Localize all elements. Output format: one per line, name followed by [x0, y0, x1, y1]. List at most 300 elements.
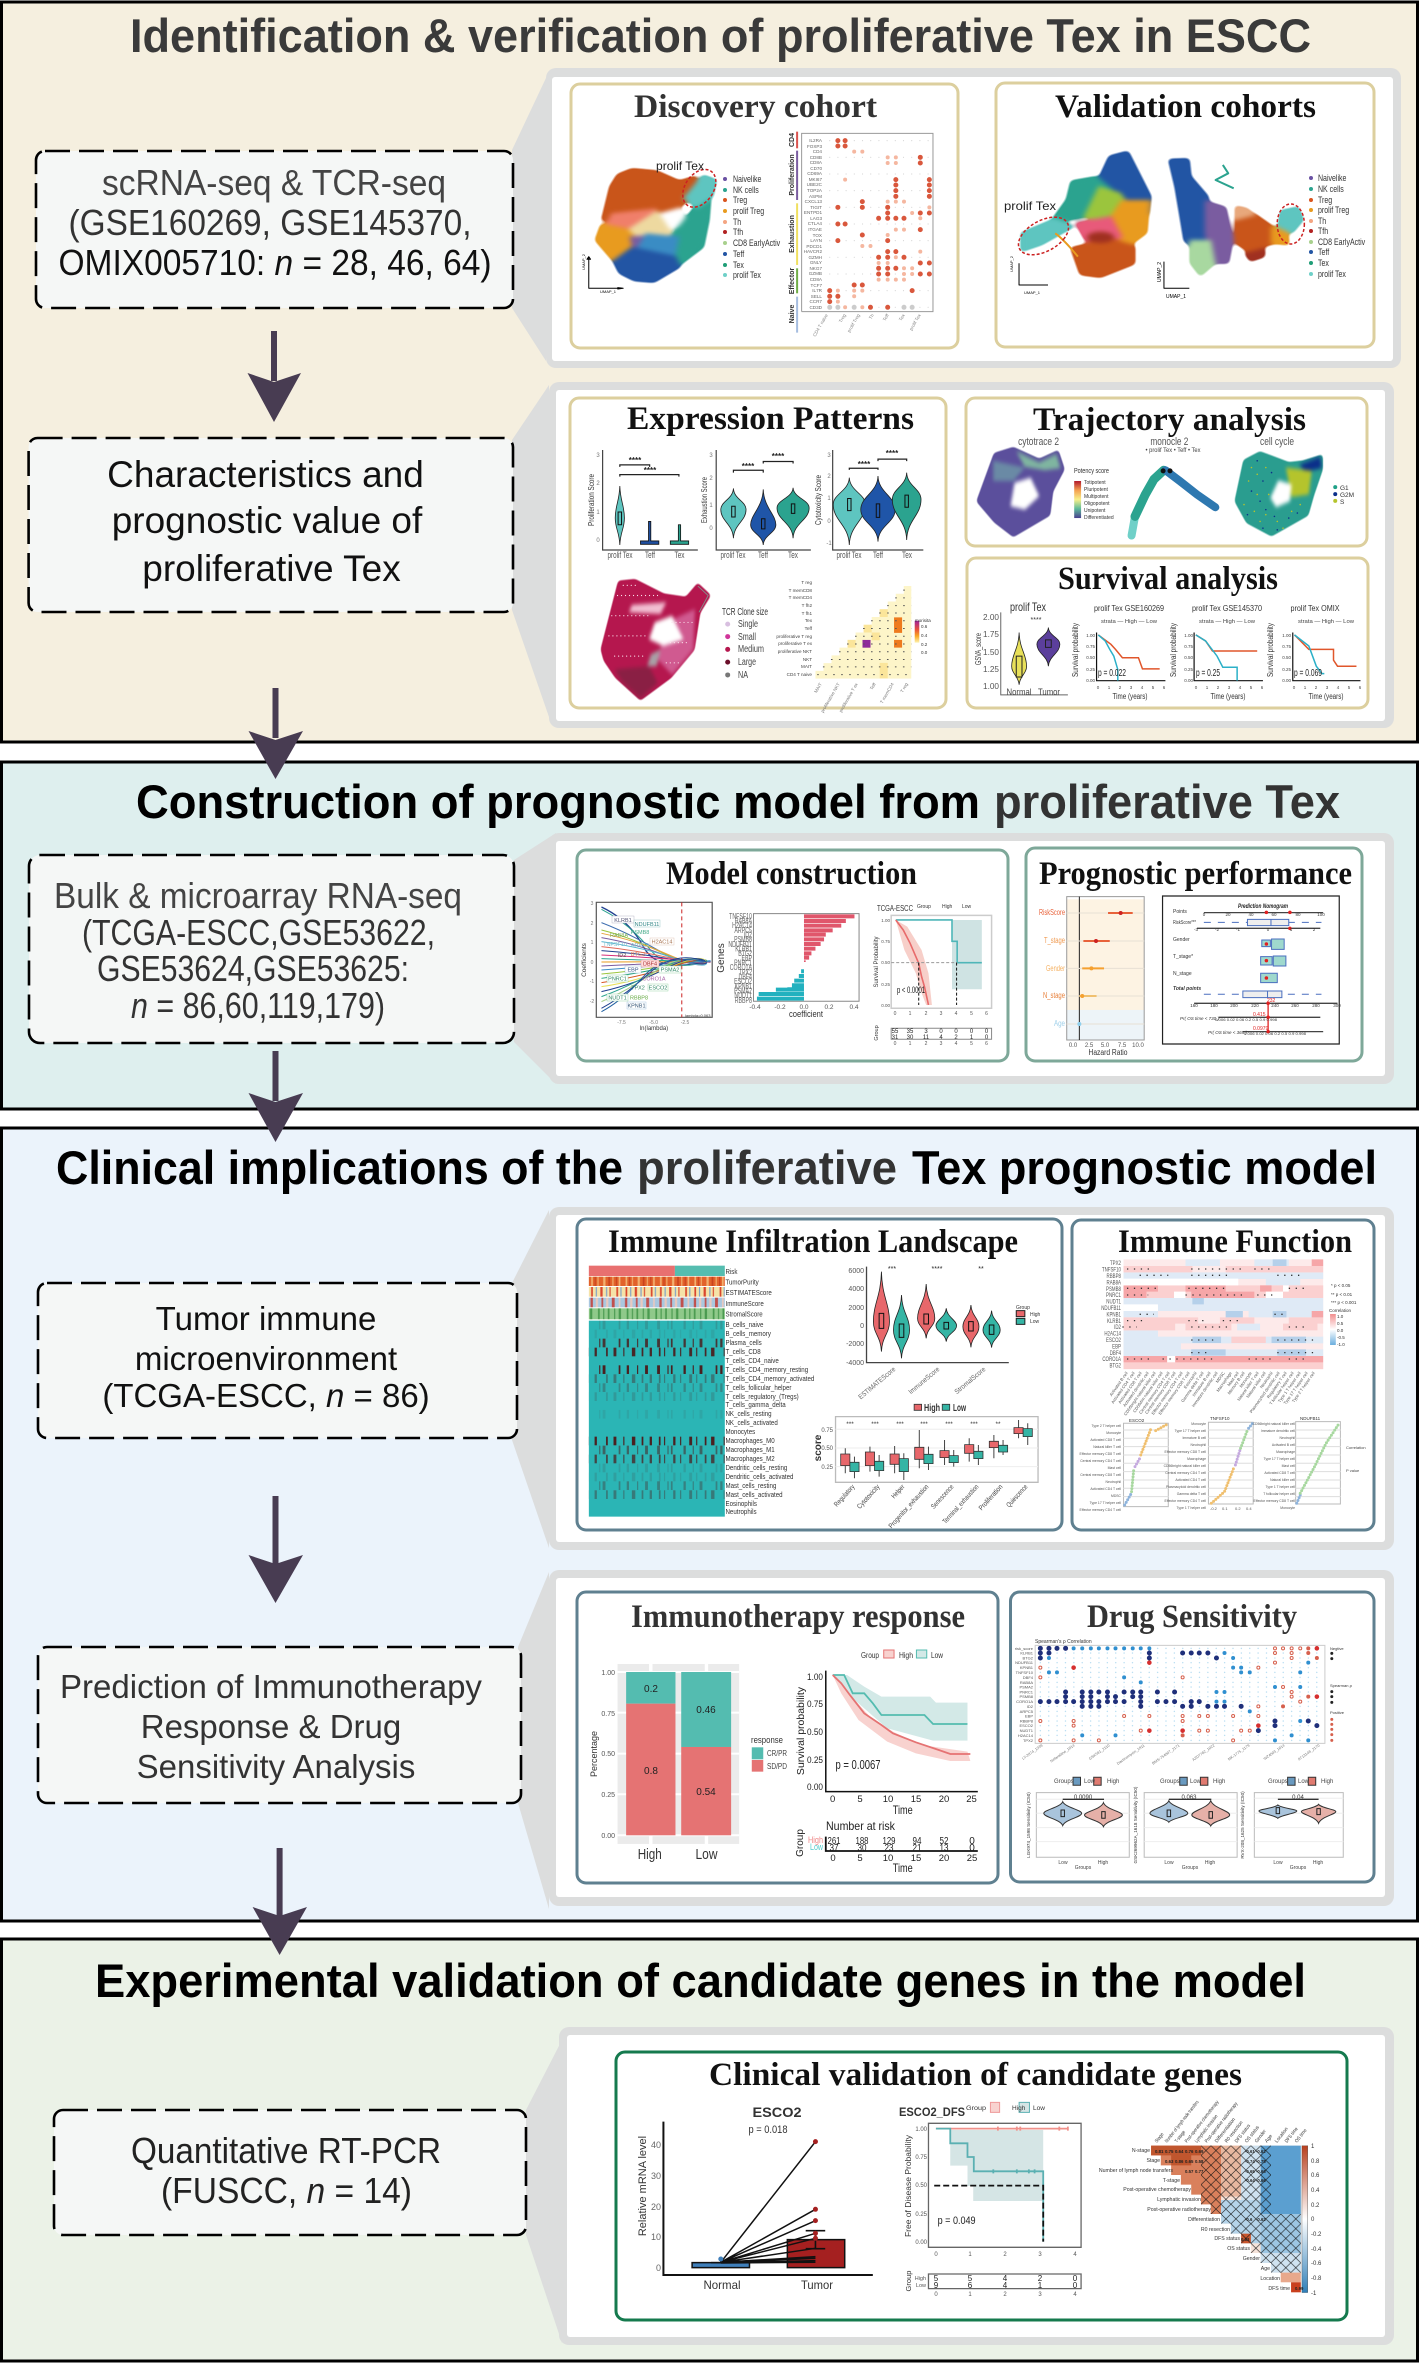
chart: lollipop TNFSF10: Activated CD4 T cell	[1175, 1478, 1206, 1482]
chart: KM GSE145370: 2	[1217, 685, 1220, 690]
chart: clinical correlation triangle: Lymphatic invasion	[1157, 2197, 1201, 2203]
callout panel: clinical validation	[526, 2027, 1394, 2345]
chart: ESCO2 DFS survival: 2	[1038, 2274, 1043, 2283]
chart: TCGA-ESCC survival: Group	[874, 1025, 880, 1041]
chart: clinical correlation triangle: Age	[1261, 2266, 1270, 2272]
chart: forest plot: 2.5	[1085, 1043, 1094, 1049]
chart: KM GSE145370: Survival probability	[1169, 623, 1178, 677]
chart: T cell state boxplots: Senescence	[930, 1484, 956, 1511]
chart: drug correlation dot matrix	[1015, 1639, 1353, 1766]
step box: characteristics: proliferative Tex	[142, 548, 401, 589]
chart: gene by immune function heatmap: -1.0	[1337, 1342, 1345, 1347]
chart: lollipop NDUFB11: Mast cell	[1282, 1464, 1295, 1468]
chart: lollipop NDUFB11: P value	[1346, 1468, 1360, 1473]
chart: TCR clone UMAP	[602, 580, 768, 699]
chart: gene by immune function heatmap: Natural killer T cell	[1236, 1371, 1260, 1402]
chart: coefficient bars: coefficient	[789, 1009, 823, 1019]
chart: discovery UMAP: prolif Tex	[656, 159, 704, 173]
chart: marker dot plot: LAYN	[810, 238, 822, 243]
chart: marker dot plot: TIGIT	[810, 205, 822, 210]
chart: score violins: prolif Tex	[836, 550, 862, 560]
chart: gene by immune function heatmap: Effector memory CD8 T cell	[1157, 1371, 1191, 1416]
step box: immunotherapy and drug sensitivity: Prediction of Immunotherapy	[60, 1668, 482, 1705]
chart: clinical correlation triangle: -0.6	[1311, 2261, 1322, 2267]
chart: coefficient bars: DBF4	[739, 974, 752, 982]
chart: coefficient bars: PNRC1	[734, 960, 752, 968]
chart: cytotrace UMAP: Unipotent	[1084, 508, 1106, 514]
chart: KM OMIX: Time (years)	[1308, 692, 1344, 701]
chart: lollipop TNFSF10: 0.4	[1246, 1506, 1252, 1511]
chart: ESCO2 DFS survival: 0.50	[915, 2183, 928, 2189]
chart: marker dot plot: PDCD1	[806, 244, 822, 249]
chart: immunotherapy survival curve: 13	[940, 1843, 949, 1854]
chart: coefficient bars: BTG2	[738, 950, 752, 958]
chart: ESCO2 DFS survival: Low	[916, 2283, 926, 2289]
step box: immunotherapy and drug sensitivity: Sensitivity Analysis	[137, 1748, 415, 1785]
chart: clinical correlation triangle: Post-operative radiotherapy	[1204, 2101, 1240, 2144]
chart: CIBERSORT heatmap: TumorPurity	[725, 1279, 759, 1287]
chart: gene by immune function heatmap: CORO1A	[1102, 1356, 1121, 1363]
chart: immunotherapy survival curve: Group	[795, 1829, 806, 1857]
chart: marker dot plot: CD4	[813, 149, 822, 154]
chart: clinical correlation triangle: 0.83	[1241, 2237, 1250, 2242]
chart: immunotherapy survival curve: p = 0.0067	[836, 1757, 880, 1772]
chart: drug correlation dot matrix: DBF4	[1023, 1675, 1034, 1680]
card: Immune Function	[1072, 1220, 1374, 1530]
chart: forest plot: RiskScore	[1039, 908, 1065, 917]
chart: monocle trajectory	[1132, 436, 1215, 536]
chart: triangular heatmap: morisita	[915, 618, 931, 623]
chart: KM GSE145370: prolif Tex GSE145370	[1192, 603, 1262, 613]
chart: LASSO coefficient paths: ln(lambda)	[640, 1026, 668, 1032]
chart: LASSO coefficient paths: DBF4	[643, 962, 657, 968]
chart: cell cycle UMAP: G1	[1340, 485, 1349, 492]
chart: prediction nomogram: Prediction Nomogram	[1238, 903, 1288, 910]
chart: gene by immune function heatmap: TPX2	[1110, 1260, 1121, 1267]
chart: marker dot plot: prolif Treg	[846, 313, 861, 333]
chart: ESCO2 paired qPCR bars: ESCO2	[752, 2104, 802, 2120]
callout panel: characteristics	[512, 382, 1394, 728]
chart: LASSO coefficient paths: KPNB1	[627, 1004, 646, 1010]
chart: KM GSE160269: Survival probability	[1071, 623, 1080, 677]
step box: tumor immune microenvironment: Tumor immune	[156, 1300, 376, 1337]
card: Expression Patterns: Expression Patterns	[627, 401, 914, 437]
chart: KM OMIX	[1266, 603, 1362, 701]
chart: cell cycle UMAP	[1236, 436, 1354, 535]
chart: prediction nomogram: 300	[1333, 1003, 1341, 1008]
chart: KM GSE160269: 0.25	[1086, 667, 1095, 672]
chart: drug sensitivity violins: Low	[1190, 1779, 1202, 1785]
chart: drug sensitivity violins: High	[1098, 1860, 1108, 1866]
chart: forest plot: 10.0	[1132, 1043, 1144, 1049]
chart: LASSO coefficient paths: -5.0	[649, 1020, 658, 1026]
chart: immunotherapy survival curve: 5	[857, 1853, 863, 1864]
chart: drug sensitivity violins: High	[1205, 1860, 1215, 1866]
chart: immunotherapy survival curve: 0.25	[807, 1755, 823, 1765]
step box: scRNA-seq: scRNA-seq & TCR-seq	[102, 162, 446, 203]
chart: lollipop NDUFB11: Correlation	[1346, 1445, 1366, 1450]
chart: gene by immune function heatmap: Neutrophil	[1259, 1371, 1274, 1389]
card: Trajectory analysis	[966, 398, 1367, 546]
chart: KM GSE145370: 5	[1250, 685, 1253, 690]
chart: gene by immune function heatmap: Regulatory T cell	[1266, 1371, 1288, 1399]
chart: drug correlation dot matrix: EBP	[1025, 1714, 1033, 1718]
chart: prediction nomogram: T_stage*	[1173, 954, 1193, 960]
chart: triangular heatmap: proliferative NKT	[778, 649, 812, 654]
chart: coefficient bars: H2AC14	[732, 922, 752, 930]
chart: LASSO coefficient paths: PSMB8	[631, 930, 649, 936]
chart: coefficient bars	[716, 913, 859, 1019]
chart: immunotherapy survival curve: 261	[828, 1836, 841, 1847]
chart: marker dot plot: ITGAE	[808, 227, 822, 232]
chart: TCGA-ESCC survival: 4	[955, 1041, 958, 1047]
chart: LASSO coefficient paths: BTG2	[631, 952, 645, 958]
section background: identification	[2, 2, 1418, 742]
chart: ESTIMATE violins: ****	[932, 1266, 943, 1273]
chart: cytotrace UMAP: Pluripotent	[1084, 487, 1109, 493]
chart: KM GSE160269: 6	[1163, 685, 1166, 690]
chart: drug sensitivity violins: 0.063	[1181, 1795, 1197, 1801]
chart: CIBERSORT heatmap: NK_cells_resting	[725, 1411, 772, 1418]
chart: immunotherapy survival curve: 20	[939, 1853, 949, 1864]
chart: lollipop ESCO2: Type 17 T helper cell	[1090, 1501, 1121, 1505]
chart: drug sensitivity violins: Low	[1164, 1860, 1174, 1866]
chart: TCGA-ESCC survival: 55	[892, 1029, 899, 1035]
chart: coefficient bars: RAB8A	[735, 918, 752, 926]
arrow 1	[248, 331, 301, 422]
chart: clinical correlation triangle: OS time	[1294, 2128, 1309, 2144]
chart: cytotrace UMAP: Oligopotent	[1084, 501, 1110, 507]
chart: T cell state boxplots: ***	[945, 1421, 953, 1428]
chart: KM GSE160269: 3	[1130, 685, 1133, 690]
chart: immunotherapy survival curve: Low	[810, 1842, 823, 1853]
chart: clinical correlation triangle: 0.99	[1295, 2286, 1304, 2291]
chart: prediction nomogram: Pr( OS time < 730 )	[1180, 1016, 1219, 1021]
chart: score violins: 3	[709, 453, 713, 459]
chart: TCGA-ESCC survival: 2	[954, 1035, 958, 1041]
chart: clinical correlation triangle: 0.86	[1175, 2159, 1184, 2164]
chart: KM GSE160269: 1.00	[1086, 633, 1095, 638]
chart: triangular heatmap: MAIT	[813, 682, 823, 694]
chart: ESCO2 DFS survival: 6	[968, 2281, 973, 2290]
chart: KM GSE145370: 6	[1261, 685, 1264, 690]
chart: ESTIMATE violins: 6000	[848, 1268, 864, 1275]
chart: score violins: -1	[826, 541, 832, 547]
chart: drug sensitivity violins: Groups	[1075, 1865, 1092, 1871]
chart: clinical correlation triangle: 0.65	[1185, 2159, 1194, 2164]
chart: score violins: ****	[886, 449, 899, 458]
chart: lollipop ESCO2: Type 2 T helper cell	[1092, 1424, 1121, 1428]
chart: CIBERSORT heatmap: Neutrophils	[725, 1509, 757, 1516]
chart: score violins: Exhaustion Score	[700, 477, 709, 523]
chart: LASSO coefficient paths: H2AC14	[652, 940, 672, 946]
chart: gene by immune function heatmap: RAB8A	[1107, 1280, 1121, 1287]
chart: gene by immune function heatmap: CD56bright natural killer cell	[1123, 1371, 1157, 1416]
chart: T cell state boxplots: 0.25	[821, 1465, 834, 1471]
chart: forest plot: T_stage	[1044, 936, 1065, 945]
chart: LASSO coefficient paths: lambda=0.063	[685, 1013, 711, 1018]
step box: characteristics: prognostic value of	[112, 500, 423, 541]
chart: marker dot plot: Naive	[789, 305, 796, 323]
chart: ESTIMATE violins: StromalScore	[954, 1366, 987, 1396]
chart: prediction nomogram: 180	[1210, 1003, 1218, 1008]
chart: coefficient bars: NUDT1	[734, 992, 752, 1000]
chart: LASSO coefficient paths: CORO1A	[642, 976, 666, 982]
chart: lollipop NDUFB11: Macrophage	[1276, 1450, 1295, 1454]
step box: scRNA-seq: (GSE160269, GSE145370,	[68, 202, 472, 243]
chart: validation UMAP 1: prolif Tex	[1004, 199, 1056, 213]
chart: gene by immune function heatmap: Memory B cell	[1227, 1371, 1246, 1395]
chart: ESCO2 DFS survival: 1	[1038, 2281, 1043, 2290]
chart: ESCO2 DFS survival: 5	[934, 2274, 939, 2283]
chart: T cell state boxplots: High	[924, 1403, 940, 1414]
chart: TCGA-ESCC survival: 1	[909, 1011, 912, 1017]
chart: drug sensitivity violins: Groups	[1290, 1865, 1307, 1871]
chart: ESTIMATE violins: High	[1030, 1312, 1041, 1318]
chart: marker dot plot: CD8B	[810, 155, 822, 160]
legend: discovery clusters: prolif Tex	[733, 270, 761, 280]
chart: KM OMIX: 5	[1348, 685, 1351, 690]
card: Prognostic performance	[1026, 848, 1362, 1061]
chart: ESTIMATE violins: -2000	[846, 1341, 864, 1348]
chart: lollipop ESCO2: Effector memory CD8 T cell	[1080, 1452, 1121, 1456]
chart: immunotherapy survival curve: 0	[830, 1794, 835, 1805]
chart: ESCO2 DFS survival: 0.00	[915, 2240, 928, 2246]
chart: clinical correlation triangle: -0.61	[1245, 2149, 1255, 2154]
chart: immunotherapy survival curve: 188	[856, 1836, 869, 1847]
chart: ESTIMATE violins: -4000	[846, 1360, 864, 1367]
chart: validation UMAP 2: UMAP_2	[1157, 262, 1163, 282]
chart: marker dot plot: Treg	[838, 313, 847, 324]
chart: immunotherapy survival curve: Low	[931, 1651, 943, 1660]
chart: prediction nomogram: 40	[1248, 912, 1254, 917]
chart: response stacked bars: 0.00	[601, 1833, 615, 1840]
chart: KM GSE145370: 0.75	[1184, 644, 1193, 649]
chart: clinical correlation triangle: -0.8	[1311, 2276, 1322, 2282]
legend: discovery clusters: Tex	[733, 260, 744, 270]
chart: response stacked bars: 0.50	[601, 1751, 615, 1758]
chart: TCGA-ESCC survival: 0	[939, 1029, 943, 1035]
callout panel: immunotherapy and drugs	[518, 1570, 1394, 1909]
chart: CIBERSORT heatmap: B_cells_naive	[725, 1322, 764, 1329]
chart: TCGA-ESCC survival: 6	[985, 1011, 988, 1017]
chart: clinical correlation triangle: 0	[1311, 2217, 1315, 2223]
chart: prediction nomogram: N_stage	[1173, 971, 1192, 977]
chart: CIBERSORT heatmap: Mast_cells_resting	[725, 1483, 777, 1490]
chart: clinical correlation triangle: -0.75	[1256, 2159, 1266, 2164]
chart: clinical correlation triangle: 0.8	[1311, 2159, 1320, 2165]
chart: LASSO coefficient paths	[581, 901, 712, 1032]
chart: score violins: prolif Tex	[720, 550, 746, 560]
chart: gene by immune function heatmap: ESCO2	[1106, 1337, 1121, 1344]
chart: drug correlation dot matrix: Dactinomycin_1811	[1116, 1744, 1146, 1766]
chart: response stacked bars: High	[638, 1846, 662, 1863]
chart: lollipop NDUFB11: Activated B cell	[1272, 1443, 1295, 1447]
chart: marker dot plot: SELL	[811, 294, 822, 299]
chart: clinical correlation triangle: -1	[1311, 2291, 1317, 2297]
chart: clinical correlation triangle: 0.57	[1185, 2169, 1194, 2174]
chart: discovery UMAP: UMAP_2	[581, 253, 586, 270]
step box: characteristics: Characteristics and	[107, 454, 424, 495]
card: Clinical validation of candidate genes: Clinical validation of candidate genes	[709, 2057, 1242, 2093]
chart: CIBERSORT heatmap: Macrophages_M1	[725, 1447, 775, 1454]
chart: drug sensitivity violins: High	[1107, 1779, 1119, 1785]
step box: bulk and microarray: GSE53624,GSE53625:	[97, 948, 409, 989]
chart: lollipop ESCO2	[1080, 1418, 1168, 1512]
chart: KM OMIX: 0.75	[1282, 644, 1291, 649]
step box: immunotherapy and drug sensitivity: Response & Drug	[141, 1708, 401, 1745]
chart: marker dot plot: IL2RA	[809, 138, 823, 143]
step box: bulk and microarray	[29, 855, 514, 1043]
chart: GSVA violin: Normal	[1006, 687, 1032, 698]
legend: validation clusters: CD8 EarlyActiv	[1318, 237, 1365, 247]
card: Model construction	[577, 850, 1008, 1061]
legend: discovery clusters: Teff	[733, 249, 745, 259]
chart: CIBERSORT heatmap: T_cells_CD4_memory_activated	[725, 1376, 815, 1383]
chart: T cell state boxplots: ***	[896, 1421, 904, 1428]
chart: TCGA-ESCC survival: 0.00	[881, 1003, 890, 1008]
chart: lollipop NDUFB11	[1253, 1416, 1366, 1510]
chart: drug sensitivity violins: LGK974_1598 Sensitivity (IC50)	[1026, 1792, 1031, 1858]
chart: ESCO2 paired qPCR bars: 30	[651, 2171, 661, 2181]
chart: TCGA-ESCC survival: Survival Probability	[874, 936, 880, 988]
chart: lollipop TNFSF10: Neutrophil	[1191, 1443, 1206, 1447]
chart: CIBERSORT heatmap: ESTIMATEScore	[725, 1290, 772, 1297]
chart: forest plot: N_stage	[1043, 991, 1065, 1000]
chart: gene by immune function heatmap: Immature dendritic cell	[1191, 1371, 1219, 1408]
chart: CIBERSORT heatmap: Macrophages_M2	[725, 1456, 775, 1463]
legend: validation clusters: prolif Treg	[1318, 205, 1349, 215]
chart: ESTIMATE violins: ESTIMATEScore	[858, 1366, 897, 1401]
chart: clinical correlation triangle: 0.6	[1311, 2173, 1320, 2179]
chart: lollipop ESCO2: Monocyte	[1106, 1431, 1121, 1435]
chart: drug correlation dot matrix: Spearman's ρ Correlation	[1035, 1639, 1092, 1645]
chart: forest plot: 0.0	[1069, 1043, 1078, 1049]
chart: ESCO2 DFS survival: 1	[968, 2292, 972, 2298]
chart: marker dot plot: Effector	[789, 268, 796, 294]
chart: TCGA-ESCC survival: 3	[940, 1041, 943, 1047]
chart: gene by immune function heatmap: NUDT1	[1106, 1299, 1121, 1306]
chart: gene by immune function heatmap: 1.0	[1337, 1314, 1344, 1319]
chart: KM GSE160269: 0.00	[1086, 678, 1095, 683]
chart: ESCO2 DFS survival: 4	[1073, 2252, 1077, 2258]
chart: lollipop ESCO2: Central memory CD8 T cell	[1080, 1473, 1121, 1477]
chart: T cell state boxplots: ***	[846, 1421, 854, 1428]
chart: LASSO coefficient paths: Coefficients	[581, 942, 588, 977]
legend: discovery clusters: Treg	[733, 195, 747, 205]
chart: prediction nomogram: -3	[1194, 927, 1198, 932]
chart: clinical correlation triangle: -0.66	[1256, 2169, 1266, 2174]
chart: response stacked bars	[589, 1664, 787, 1863]
title: clinical implications: Tex prognostic model	[912, 1141, 1377, 1194]
chart: response stacked bars: 0.75	[601, 1711, 615, 1718]
chart: immunotherapy survival curve: Survival probability	[795, 1686, 807, 1775]
chart: prediction nomogram: 200	[1230, 1003, 1238, 1008]
arrow 4	[248, 1496, 303, 1603]
chart: immunotherapy survival curve: 5	[857, 1794, 863, 1805]
chart: drug correlation dot matrix: Spearman ρ	[1330, 1683, 1353, 1688]
chart: marker dot plot: CXCL13	[805, 199, 822, 204]
card: Drug Sensitivity	[1010, 1592, 1374, 1882]
chart: lollipop TNFSF10: Type 1 T helper cell	[1177, 1506, 1206, 1510]
chart: ESTIMATE violins: 4000	[848, 1286, 864, 1293]
chart: TCR clone UMAP: Single	[738, 619, 758, 630]
title: construction of prognostic model: Construction of prognostic model from	[136, 775, 980, 828]
chart: KM GSE145370: strata — High — Low	[1199, 619, 1255, 625]
chart: clinical correlation triangle: Age	[1264, 2133, 1274, 2144]
card: Survival analysis: Survival analysis	[1058, 561, 1278, 597]
chart: lollipop TNFSF10: Monocyte	[1191, 1422, 1206, 1426]
chart: lollipop ESCO2: Mast cell	[1108, 1466, 1121, 1470]
chart: gene by immune function heatmap: Gamma delta T cell	[1180, 1371, 1205, 1403]
chart: response stacked bars: 1.00	[601, 1670, 615, 1677]
chart: clinical correlation triangle: Location	[1274, 2126, 1290, 2144]
chart: clinical correlation triangle: T-stage	[1174, 2129, 1187, 2144]
chart: KM GSE145370: 0.50	[1184, 655, 1193, 660]
chart: GSVA violin: 1.00	[983, 681, 999, 691]
chart: ESTIMATE violins	[846, 1266, 1041, 1401]
chart: TCGA-ESCC survival: High	[942, 904, 953, 910]
chart: TCGA-ESCC survival: 1.00	[881, 918, 890, 923]
chart: drug sensitivity violins: Low	[1084, 1779, 1096, 1785]
chart: prediction nomogram: 232	[1267, 998, 1276, 1004]
card: Immunotherapy response: Immunotherapy response	[631, 1599, 965, 1635]
chart: LASSO coefficient paths: PNRC1	[608, 976, 627, 982]
chart: immunotherapy survival curve: High	[808, 1835, 823, 1846]
chart: prediction nomogram: 20	[1225, 912, 1231, 917]
chart: ESCO2 DFS survival: Group	[904, 2271, 913, 2291]
chart: TCGA-ESCC survival: 1	[970, 1035, 974, 1041]
chart: score violins: Teff	[873, 550, 883, 560]
chart: score violins: 2	[709, 476, 713, 482]
chart: ESCO2 DFS survival: 4	[1003, 2274, 1008, 2283]
chart: validation UMAP 2	[1157, 159, 1304, 300]
card: Immune Function: Immune Function	[1118, 1224, 1352, 1260]
chart: score violins: Tex	[902, 550, 912, 560]
chart: cell cycle UMAP: cell cycle	[1260, 436, 1294, 448]
chart: KM OMIX: 0.00	[1282, 678, 1291, 683]
chart: clinical correlation triangle: 0.69	[1195, 2149, 1204, 2154]
step box: quantitative RT-PCR: Quantitative RT-PCR	[131, 2130, 441, 2171]
chart: coefficient bars: NDUFB11	[728, 941, 752, 949]
step box: bulk and microarray: n = 86,60,119,179)	[131, 985, 385, 1026]
chart: KM GSE160269: prolif Tex GSE160269	[1094, 603, 1164, 613]
chart: drug sensitivity violins: High	[1213, 1779, 1225, 1785]
chart: immunotherapy survival curve: 0.50	[807, 1727, 823, 1737]
chart: response stacked bars: 0.2	[644, 1684, 658, 1695]
chart: coefficient bars: ID2	[744, 932, 752, 940]
chart: gene by immune function heatmap: Effector memory CD4 T cell	[1150, 1371, 1184, 1416]
chart: prediction nomogram: 0	[1267, 927, 1270, 932]
chart: ESCO2 DFS survival: Free of Disease Probability	[903, 2134, 913, 2237]
chart: drug correlation dot matrix: RAB8A	[1020, 1680, 1033, 1685]
chart: immunotherapy survival curve: 1.00	[807, 1672, 823, 1682]
chart: gene by immune function heatmap: Activated B cell	[1108, 1371, 1129, 1397]
chart: LASSO coefficient paths: ARPC5	[631, 943, 649, 949]
chart: ESCO2 paired qPCR bars: 10	[651, 2232, 661, 2242]
chart: CIBERSORT heatmap: Mast_cells_activated	[725, 1492, 783, 1499]
chart: coefficient bars: ARPC5	[734, 927, 752, 935]
chart: LASSO coefficient paths: -2.5	[681, 1020, 690, 1026]
chart: TCGA-ESCC survival: 0	[970, 1029, 974, 1035]
chart: cytotrace UMAP: Multipotent	[1084, 494, 1109, 500]
chart: lollipop NDUFB11: NDUFB11	[1300, 1416, 1321, 1421]
step box: scRNA-seq	[36, 151, 513, 308]
chart: clinical correlation triangle: Stage	[1146, 2158, 1160, 2164]
chart: score violins: 1	[596, 510, 600, 516]
chart: marker dot plot: CD8A	[810, 160, 823, 165]
chart: ESCO2 DFS survival: 0	[934, 2252, 938, 2258]
